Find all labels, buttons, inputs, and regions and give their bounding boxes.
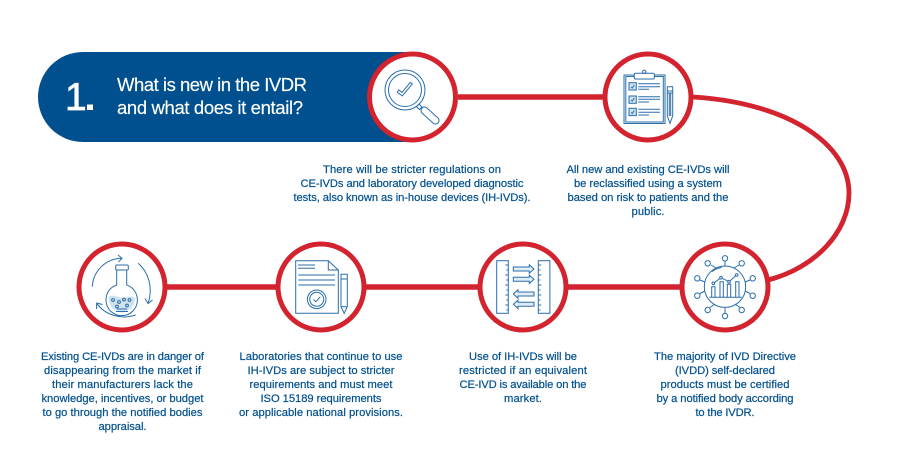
text: market danger <box>41 351 205 433</box>
header pill <box>38 52 415 142</box>
icon: bar chart in network <box>695 256 755 319</box>
text: stricter regulations: There will be stricter regulations on <box>323 164 501 176</box>
text: certification: The majority of IVD Directive <box>654 351 796 363</box>
step circle: network chart <box>682 244 768 330</box>
title <box>117 74 307 118</box>
text: reclassification <box>566 164 730 218</box>
text: laboratory requirements: IH-IVDs are subject to stricter <box>248 365 395 377</box>
text: market danger: knowledge, incentives, or budget <box>42 393 204 405</box>
text: market danger: appraisal. <box>98 421 146 433</box>
title: What is new in the IVDR <box>117 74 307 95</box>
step circle: rulers <box>480 244 566 330</box>
icon: clipboard and pencil <box>624 70 673 124</box>
icon: magnifying glass with check <box>385 70 436 120</box>
text: laboratory requirements: ISO 15189 requirements <box>260 393 382 405</box>
text: laboratory requirements <box>239 351 403 419</box>
text: reclassification: be reclassified using a system <box>574 178 722 190</box>
title: and what does it entail? <box>117 97 303 118</box>
text: stricter regulations <box>294 164 530 204</box>
text: certification: by a notified body according <box>656 393 794 405</box>
text: stricter regulations: tests, also known as in-house devices (IH-IVDs). <box>294 192 530 204</box>
icon: rulers and arrows <box>497 261 550 313</box>
text: restricted use: market. <box>504 393 542 405</box>
text: restricted use: CE-IVD is available on the <box>460 379 586 391</box>
text: certification: to the IVDR. <box>696 407 754 419</box>
step circle: document <box>278 244 364 330</box>
text: market danger: Existing CE-IVDs are in danger of <box>41 351 205 363</box>
text: certification: products must be certified <box>660 379 790 391</box>
text: market danger: disappearing from the market if <box>44 365 202 377</box>
icon: flask with cycle arrows <box>92 255 152 317</box>
icon: certified document and pencil <box>296 261 347 313</box>
text: reclassification: All new and existing CE-IVDs will <box>566 164 730 176</box>
text: laboratory requirements: Laboratories that continue to use <box>240 351 402 363</box>
text: market danger: to go through the notified bodies <box>42 407 203 419</box>
timeline connector: bottom row <box>167 284 680 290</box>
text: reclassification: public. <box>632 206 664 218</box>
text: laboratory requirements: or applicable national provisions. <box>239 407 403 419</box>
text: laboratory requirements: requirements and must meet <box>250 379 393 391</box>
step circle: flask <box>79 244 165 330</box>
text: certification: (IVDD) self-declared <box>675 365 775 377</box>
timeline connector: top row and curve <box>458 94 603 100</box>
text: restricted use: Use of IH-IVDs will be <box>469 351 577 363</box>
text: restricted use <box>459 351 588 405</box>
step number: 1 <box>65 76 87 119</box>
step circle: checklist <box>605 54 691 140</box>
text: certification <box>654 351 796 419</box>
text: market danger: their manufacturers lack the <box>52 379 193 391</box>
timeline curve <box>693 97 849 280</box>
text: stricter regulations: CE-IVDs and laboratory developed diagnostic <box>300 178 524 190</box>
text: reclassification: based on risk to patients and the <box>568 192 728 204</box>
step circle: magnifier <box>370 54 456 140</box>
text: restricted use: restricted if an equivalent <box>459 365 588 377</box>
